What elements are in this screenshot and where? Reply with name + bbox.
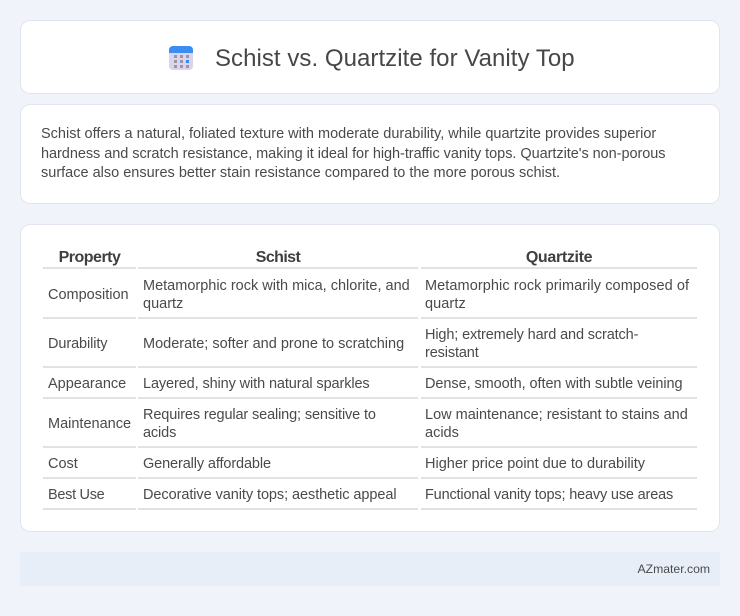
header: Quartzite: Quartzite [526, 249, 592, 266]
header: Schist: Schist [256, 249, 300, 266]
comparison table: resistant [425, 345, 479, 361]
comparison table: Low maintenance; resistant to stains and [425, 407, 688, 423]
title: Schist vs. Quartzite for Vanity Top [215, 45, 575, 72]
row: Best Use: Best Use [48, 487, 104, 503]
row: Appearance: Appearance [48, 376, 126, 392]
icon: calendar [169, 46, 193, 70]
comparison table: Functional vanity tops; heavy use areas [425, 487, 673, 503]
comparison table: quartz [143, 296, 183, 312]
row: Cost: Cost [48, 456, 78, 472]
summary panel [20, 104, 720, 204]
row: Composition: Composition [48, 287, 129, 303]
comparison table: Higher price point due to durability [425, 456, 645, 472]
comparison table: Layered, shiny with natural sparkles [143, 376, 370, 392]
comparison table: acids [425, 425, 459, 441]
summary text: Schist offers a natural, foliated texture with moderate durability, while quartzite provides superior [41, 126, 656, 142]
header panel [20, 20, 720, 94]
comparison table: acids [143, 425, 176, 441]
footer credit: AZmater.com [638, 562, 710, 576]
comparison table: Moderate; softer and prone to scratching [143, 336, 404, 352]
comparison table: Generally affordable [143, 456, 271, 472]
footer bar [20, 552, 720, 586]
comparison table: Metamorphic rock primarily composed of [425, 278, 689, 294]
comparison table: Dense, smooth, often with subtle veining [425, 376, 683, 392]
summary text: surface also ensures better stain resistance compared to the more porous schist. [41, 165, 560, 181]
comparison table: Decorative vanity tops; aesthetic appeal [143, 487, 397, 503]
table panel [20, 224, 720, 532]
comparison table: quartz [425, 296, 466, 312]
row: Maintenance: Maintenance [48, 416, 131, 432]
summary text: hardness and scratch resistance, making it ideal for high-traffic vanity tops. Quartzite's non-porous [41, 146, 665, 162]
row: Durability: Durability [48, 336, 107, 352]
header: Property: Property [59, 249, 120, 266]
summary text [41, 126, 665, 181]
comparison table: Metamorphic rock with mica, chlorite, and [143, 278, 410, 294]
comparison table: High; extremely hard and scratch- [425, 327, 638, 343]
comparison table: Requires regular sealing; sensitive to [143, 407, 376, 423]
